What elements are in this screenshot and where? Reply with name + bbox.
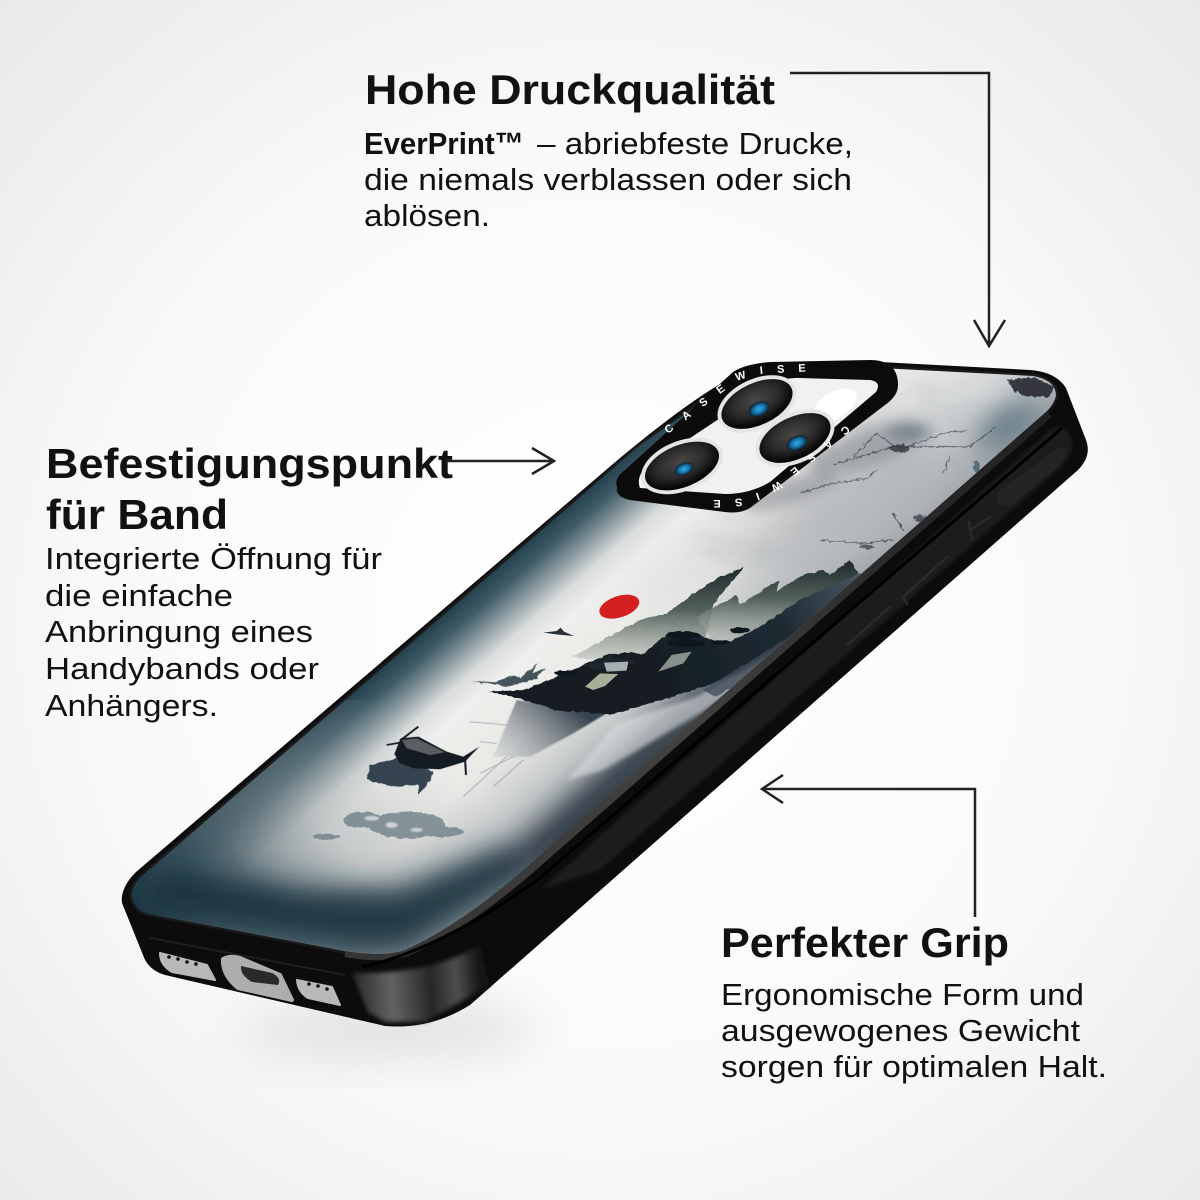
cloud reflection xyxy=(313,812,463,839)
boat xyxy=(387,727,479,775)
fog over island xyxy=(568,652,772,780)
camera plateau xyxy=(639,378,878,494)
speaker right xyxy=(297,980,340,1005)
side buttons xyxy=(847,517,990,645)
body text: ablösen. xyxy=(364,198,490,233)
side surface sheen xyxy=(540,427,1072,890)
body text: die niemals verblassen oder sich xyxy=(364,162,852,197)
printed landscape artwork xyxy=(132,361,1056,954)
body text: EverPrint™ xyxy=(364,126,524,161)
landscape detail xyxy=(313,560,865,839)
charging port xyxy=(223,957,292,1000)
island dark base xyxy=(488,573,865,714)
small distant boat xyxy=(543,628,574,636)
body text: Integrierte Öffnung für xyxy=(45,541,382,576)
body text xyxy=(45,541,382,723)
body text: Handybands oder xyxy=(45,651,319,686)
screen outline xyxy=(132,368,1056,954)
speaker left xyxy=(160,953,215,980)
phone shadow xyxy=(240,1004,540,1056)
body text: – abriebfeste Drucke, xyxy=(537,126,853,161)
ring lettering xyxy=(640,361,879,512)
body text xyxy=(721,977,1107,1084)
body text xyxy=(364,126,853,233)
heading: Perfekter Grip xyxy=(721,919,1009,966)
rim groove xyxy=(362,428,1062,967)
arrow: grip xyxy=(762,775,975,917)
mist upper area xyxy=(702,370,1030,578)
phone case illustration xyxy=(122,360,1088,1026)
callout: strap attachment xyxy=(45,440,453,723)
side charging lobe xyxy=(997,447,1065,506)
lens left xyxy=(633,427,731,505)
bottom port details xyxy=(160,945,490,1022)
reflection of island xyxy=(493,700,607,757)
heading xyxy=(46,440,453,538)
temple xyxy=(585,653,635,672)
glossy corner xyxy=(352,945,490,1022)
heading: für Band xyxy=(46,491,228,538)
side small peaks xyxy=(472,663,545,687)
lens right xyxy=(746,398,844,478)
callout: print quality xyxy=(364,66,853,233)
heading: Befestigungspunkt xyxy=(46,440,453,487)
trees xyxy=(555,627,750,676)
camera ring xyxy=(616,360,898,512)
case body xyxy=(122,362,1088,1027)
boat reflection xyxy=(367,758,433,795)
red sun xyxy=(599,594,640,619)
far mountains xyxy=(573,560,858,663)
body text: Ergonomische Form und xyxy=(721,977,1084,1012)
body text: ausgewogenes Gewicht xyxy=(721,1013,1080,1048)
body text: sorgen für optimalen Halt. xyxy=(721,1049,1107,1084)
ink smudges top xyxy=(739,412,933,519)
ring lettering: CASEWISE xyxy=(665,364,806,432)
dark lower bands xyxy=(140,390,1048,952)
ring lettering: CASEWISE xyxy=(714,426,850,508)
body text: Anbringung eines xyxy=(45,614,313,649)
mist texture xyxy=(700,383,932,562)
callout: grip xyxy=(721,919,1107,1084)
ink branches top xyxy=(800,377,1053,549)
heading: Hohe Druckqualität xyxy=(365,66,775,113)
pale slope xyxy=(585,673,618,690)
rim highlight xyxy=(345,414,1049,956)
body text: die einfache xyxy=(45,578,233,613)
arrow: print quality xyxy=(790,73,1005,346)
camera module xyxy=(616,360,898,512)
lens top xyxy=(708,364,806,444)
body text: Anhängers. xyxy=(45,688,218,723)
arrow: strap attachment xyxy=(445,448,554,474)
